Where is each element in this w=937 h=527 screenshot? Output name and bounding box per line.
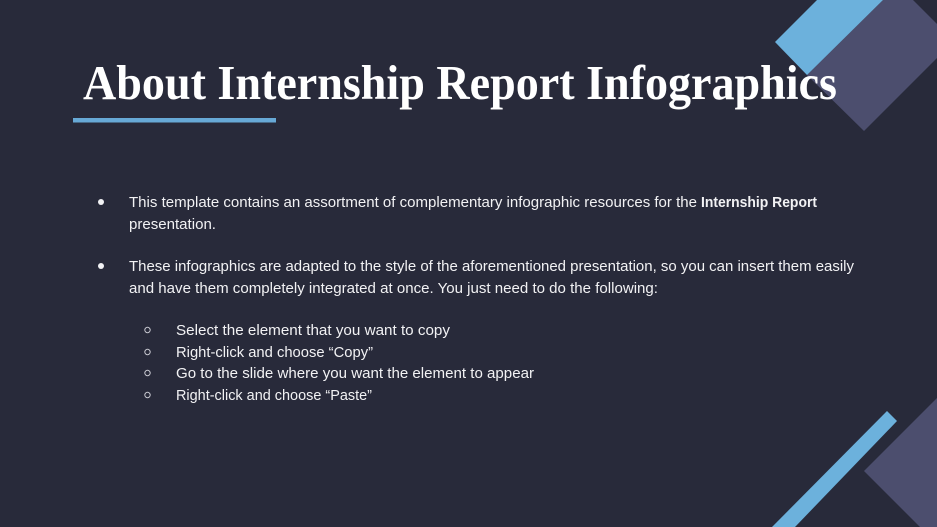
bullet item: template description: presentation. xyxy=(129,217,216,233)
text block: main bullets xyxy=(98,195,855,297)
bullet item: usage description: and have them completely integrated at once. You just need to do the following: xyxy=(129,281,658,297)
decoration: top-right shapes xyxy=(775,0,937,131)
step 3: Go to the slide where you want the element to appear xyxy=(176,366,534,382)
text block: steps list xyxy=(145,323,534,404)
title: About Internship Report Infographics xyxy=(83,55,837,110)
bullet item: template description xyxy=(98,195,817,233)
step 2: Right-click and choose “Copy” xyxy=(176,345,373,361)
decoration: bottom-right shapes xyxy=(772,398,937,527)
step 1: Select the element that you want to copy xyxy=(176,323,451,339)
title underline xyxy=(73,118,276,122)
bullet item: template description: Internship Report xyxy=(701,195,817,211)
bullet item: template description: This template contains an assortment of complementary infographic resources for the xyxy=(129,195,697,211)
bullet item: usage description xyxy=(98,259,855,297)
bullet item: usage description: These infographics are adapted to the style of the aforementioned presentation, so you can insert them easily xyxy=(129,259,855,275)
step 4: Right-click and choose “Paste” xyxy=(176,388,372,404)
